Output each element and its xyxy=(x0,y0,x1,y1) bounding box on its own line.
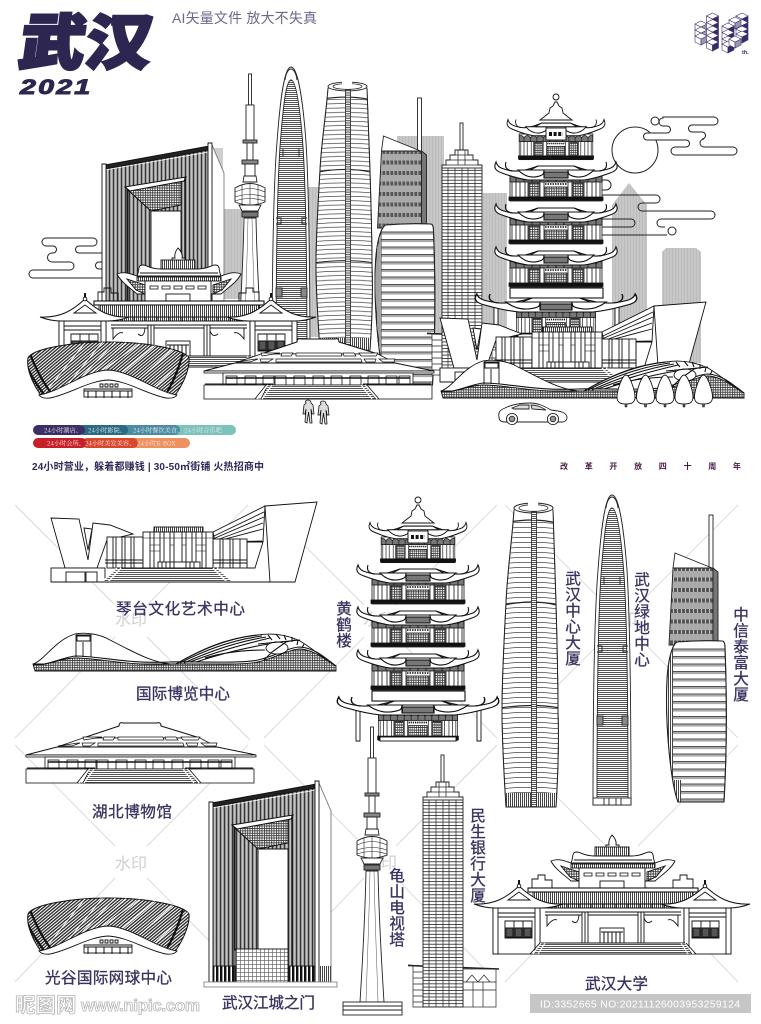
watermark grid xyxy=(15,505,738,982)
building: Guishan TV tower xyxy=(221,74,280,362)
label: Gate: 武汉江城之门 xyxy=(222,994,315,1012)
label: Greenland: 中 xyxy=(634,635,650,653)
label: CITIC: 中 xyxy=(733,606,749,624)
tag pills row 1: 24小时潮店、 xyxy=(44,425,82,434)
cloud: right middle xyxy=(600,180,715,235)
nipic logo xyxy=(15,994,200,1017)
building: Hubei Museum xyxy=(204,339,434,399)
icon: 40th anniversary cubes xyxy=(695,13,749,56)
tag pills row 1 xyxy=(33,425,236,435)
label: Minsheng: 银 xyxy=(470,839,486,857)
CITIC Pacific xyxy=(660,515,732,805)
year: 2021 xyxy=(19,76,90,99)
label: Yellow Crane Tower: 楼 xyxy=(336,632,352,650)
label: Tennis: 光谷国际网球中心 xyxy=(45,969,172,987)
panel: landmark catalogue xyxy=(26,495,750,1015)
label: Minsheng: 行 xyxy=(470,855,486,873)
label: Wuhan Center: 汉 xyxy=(565,586,581,604)
label: CITIC: 富 xyxy=(733,654,749,672)
building: Wuhan Center xyxy=(314,81,377,350)
Minsheng Bank xyxy=(408,755,499,1007)
building: Greenland Center xyxy=(272,67,310,377)
label: Qintai: 琴台文化艺术中心 xyxy=(116,600,245,618)
nipic logo: www.nipic.com xyxy=(80,996,200,1015)
label: Greenland: 绿 xyxy=(634,603,650,621)
tag pills row 1: 24小时音乐吧 xyxy=(184,425,222,434)
tag pills row 2: 24小时K-BOX xyxy=(137,438,176,447)
label: TV tower: 龟 xyxy=(389,867,405,885)
cloud: left xyxy=(29,238,103,278)
Expo Center xyxy=(33,633,336,671)
Greenland Center xyxy=(593,495,631,805)
icon: car xyxy=(499,403,567,425)
watermark grid: 水印 xyxy=(115,855,147,873)
tag pills row 2: 24小时会所、 xyxy=(47,438,85,447)
panel: top skyline illustration xyxy=(26,67,744,425)
label: Wuhan Center: 心 xyxy=(565,618,581,636)
label: Greenland: 地 xyxy=(634,619,650,637)
watermark grid: 水印 xyxy=(115,611,147,629)
building: Minsheng Bank xyxy=(427,123,518,375)
label: Minsheng: 厦 xyxy=(470,888,486,905)
sun xyxy=(612,127,658,173)
tag pills row 2: 24小时美发美容、 xyxy=(85,438,135,447)
slogan: 24小时营业，躲着都赚钱 | 30-50㎡街铺 火热招商中 xyxy=(32,460,264,473)
Qintai Culture Center xyxy=(51,502,317,582)
icon: pedestrians xyxy=(303,400,329,424)
Tennis Center xyxy=(26,893,190,954)
building: Optics Valley Tennis Center xyxy=(26,337,190,398)
Wuhan Center xyxy=(500,502,563,807)
TV tower xyxy=(343,727,402,1015)
label: Greenland: 心 xyxy=(634,651,650,669)
label: TV tower: 电 xyxy=(389,899,405,917)
building: Jiangcheng Gate xyxy=(97,143,230,349)
label: Greenland: 汉 xyxy=(634,587,650,605)
label: Yellow Crane Tower: 黄 xyxy=(336,600,352,618)
building: Wuhan University xyxy=(40,248,316,367)
Wuhan University xyxy=(474,835,750,954)
tag pills row 1: 24小时餐饮美食、 xyxy=(133,425,183,434)
label: CITIC: 泰 xyxy=(733,638,749,656)
tag pills row 1: 24小时影院、 xyxy=(88,425,126,434)
label: Yellow Crane Tower: 鹤 xyxy=(336,616,352,634)
watermark grid: 水印 xyxy=(363,611,395,629)
watermark grid: 水印 xyxy=(605,611,637,629)
label: CITIC: 信 xyxy=(733,622,749,640)
label: Wuhan Center: 厦 xyxy=(565,651,581,668)
building: Expo Center xyxy=(441,360,744,398)
grey background buildings xyxy=(210,136,701,363)
label: TV tower: 山 xyxy=(389,883,405,901)
label: Minsheng: 生 xyxy=(470,823,486,841)
image id bar xyxy=(530,994,751,1013)
building: Qintai Culture Center xyxy=(440,302,706,382)
building: Yellow Crane Tower xyxy=(475,94,637,338)
label: Greenland: 武 xyxy=(634,571,650,589)
tag pills row 2 xyxy=(33,438,190,448)
label: Expo: 国际博览中心 xyxy=(136,685,230,703)
label: University: 武汉大学 xyxy=(585,975,648,993)
watermark grid: 水印 xyxy=(365,854,397,872)
anniversary line: 改革开放四十周年 xyxy=(560,461,758,471)
label: Minsheng: 大 xyxy=(470,871,486,889)
label: Museum: 湖北博物馆 xyxy=(92,803,172,821)
subtitle: AI矢量文件 放大不失真 xyxy=(172,10,317,26)
image id bar: ID:3352665 NO:20211126003953259124 xyxy=(540,1000,740,1010)
label: CITIC: 厦 xyxy=(733,687,749,704)
label: TV tower: 塔 xyxy=(389,931,405,949)
trees xyxy=(617,375,712,407)
nipic logo: 昵图网 xyxy=(15,994,76,1017)
Yellow Crane Tower xyxy=(337,497,499,741)
label: TV tower: 视 xyxy=(389,915,405,933)
building: CITIC Pacific xyxy=(368,98,440,388)
label: Wuhan Center: 大 xyxy=(565,634,581,652)
label: Minsheng: 民 xyxy=(470,808,486,825)
Jiangcheng Gate xyxy=(204,781,337,987)
label: Wuhan Center: 武 xyxy=(565,570,581,588)
Hubei Museum xyxy=(26,723,256,783)
icon: 40th anniversary cubes: th. xyxy=(742,50,749,56)
label: CITIC: 大 xyxy=(733,670,749,688)
label: Wuhan Center: 中 xyxy=(565,602,581,620)
cloud: upper right xyxy=(644,117,737,155)
